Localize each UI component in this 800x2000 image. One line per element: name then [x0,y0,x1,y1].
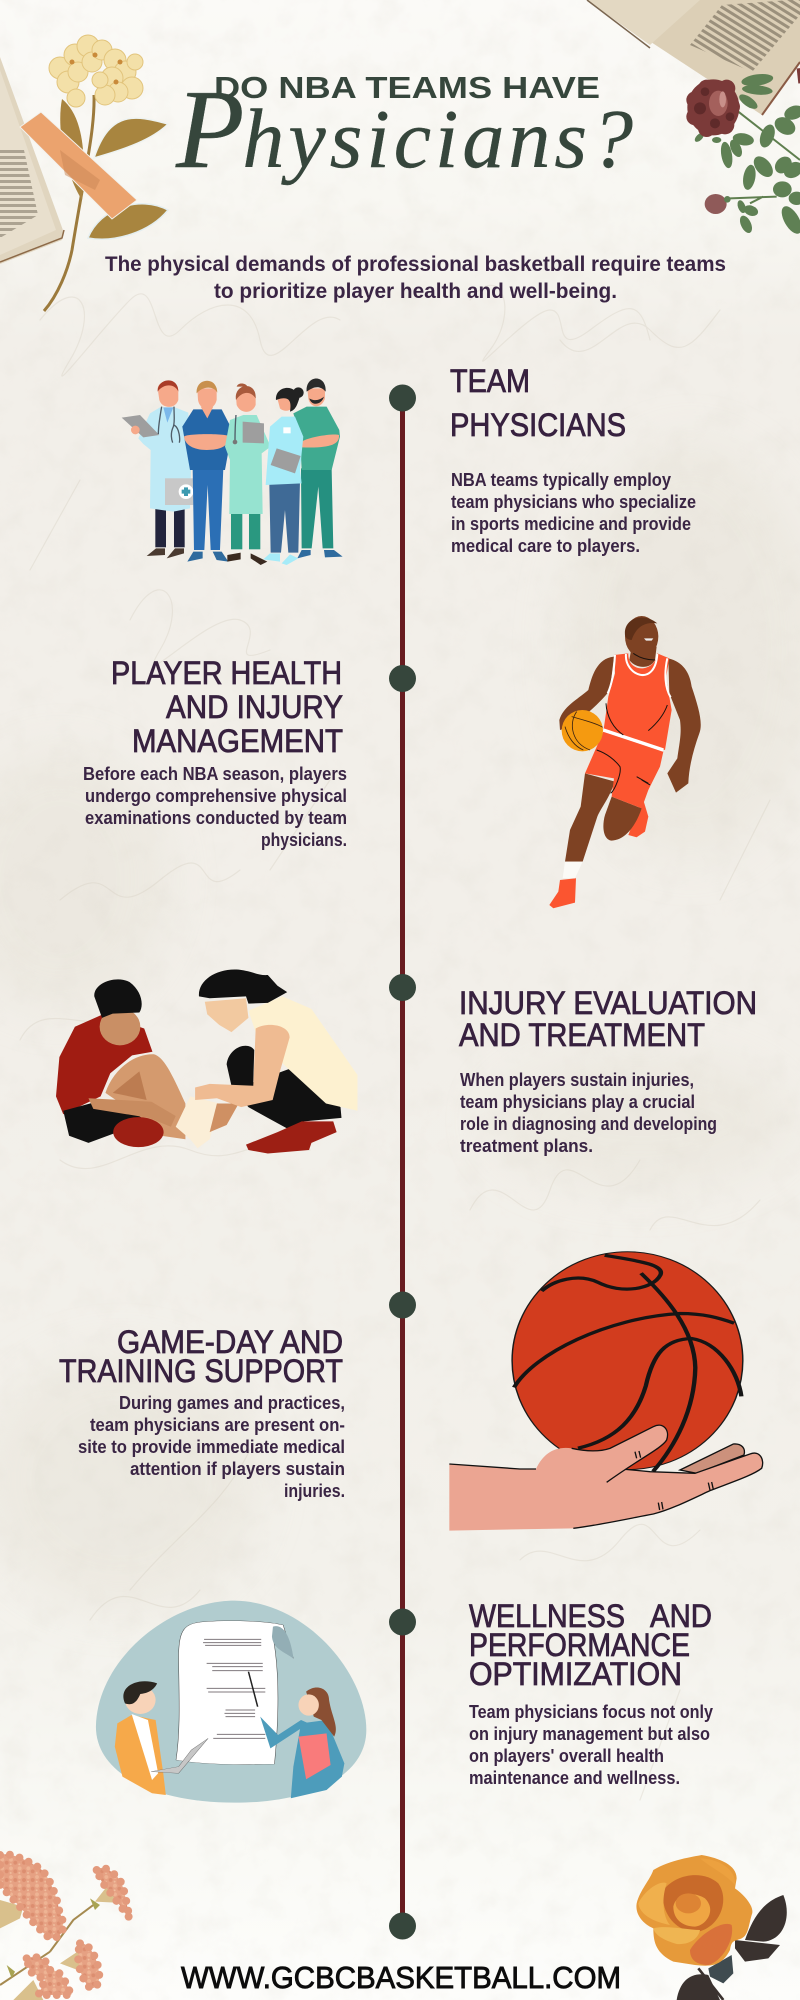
team physicians text: medical care to players. [451,536,640,556]
decoration: book top left [0,57,64,264]
team physicians text: in sports medicine and provide [451,514,691,534]
decoration: orange tape [20,112,137,219]
game-day text: During games and practices, [119,1393,345,1413]
paper scroll [176,1621,293,1765]
player health text: undergo comprehensive physical [85,786,347,806]
wellness text: on players' overall health [469,1746,664,1766]
decoration: red roses and leaves [686,68,800,237]
nurse [263,387,304,565]
intro text: to prioritize player health and well-being. [214,279,617,303]
doctor in mint coat [225,384,271,565]
timeline [389,384,416,1940]
injured boy [56,979,185,1147]
intro text [105,252,726,303]
wellness text: Team physicians focus not only [469,1702,713,1722]
jersey [603,653,672,750]
wellness text: AND [650,1598,712,1634]
game-day text: TRAINING SUPPORT [59,1353,343,1389]
neck and head [629,647,657,667]
shorts [585,732,663,808]
illustration: medical team [122,379,343,565]
website url: WWW.GCBCBASKETBALL.COM [181,1960,621,1995]
ball [562,710,603,751]
injury evaluation text: When players sustain injuries, [460,1070,694,1090]
decoration: orange rose [636,1855,787,2000]
wellness text: maintenance and wellness. [469,1768,680,1788]
sock and shoe [549,878,576,908]
player health text: MANAGEMENT [132,723,343,759]
injury evaluation text: team physicians play a crucial [460,1092,695,1112]
bandaged foot [176,1096,239,1148]
wellness text: WELLNESS [469,1598,625,1634]
front leg [565,773,615,862]
doctor in green scrubs [293,379,343,558]
injury evaluation text: treatment plans. [460,1136,593,1156]
illustration: basketball on hand [449,1252,763,1531]
player health text: physicians. [261,830,347,850]
player health text [83,655,347,850]
player health text: Before each NBA season, players [83,764,347,784]
player health text: PLAYER HEALTH [111,655,342,691]
game-day text: site to provide immediate medical [78,1437,345,1457]
injury evaluation text [459,985,757,1156]
team physicians text: PHYSICIANS [450,407,626,443]
team physicians text [450,363,696,556]
team physicians text: TEAM [450,363,530,399]
team physicians text: NBA teams typically employ [451,470,671,490]
arms [559,657,701,793]
man with laptop [115,1681,208,1795]
decoration: coral flowers [0,1854,130,2000]
basketball [512,1252,743,1471]
doctor with lab coat [122,380,193,558]
wellness text [469,1598,713,1788]
injury evaluation text: role in diagnosing and developing [460,1114,717,1134]
game-day text: injuries. [284,1481,345,1501]
woman helping [195,969,357,1154]
title: DO NBA TEAMS HAVE [214,70,600,105]
wellness text: on injury management but also [469,1724,710,1744]
back leg [628,800,648,837]
wellness text: PERFORMANCE [469,1627,690,1663]
intro text: The physical demands of professional basketball require teams [105,252,726,276]
injury evaluation text: INJURY EVALUATION [459,985,757,1021]
team physicians text: team physicians who specialize [451,492,696,512]
title: Physicians? [175,68,637,192]
doctor in blue scrubs [182,381,232,562]
illustration: basketball player [549,616,701,908]
game-day text: GAME-DAY AND [117,1324,343,1360]
decoration: book top right [587,0,800,115]
injury evaluation text: AND TREATMENT [459,1017,705,1053]
illustration: treating an injury [56,969,357,1154]
player health text: AND INJURY [166,689,343,725]
illustration: report presentation [96,1601,366,1803]
game-day text: attention if players sustain [130,1459,345,1479]
game-day text: team physicians are present on- [90,1415,345,1435]
player health text: examinations conducted by team [85,808,347,828]
wellness text: OPTIMIZATION [469,1656,682,1692]
decoration: dried flower [44,35,168,311]
game-day text [59,1324,345,1501]
hand [449,1425,763,1531]
woman with pointer [248,1672,344,1798]
blue blob [96,1601,366,1803]
